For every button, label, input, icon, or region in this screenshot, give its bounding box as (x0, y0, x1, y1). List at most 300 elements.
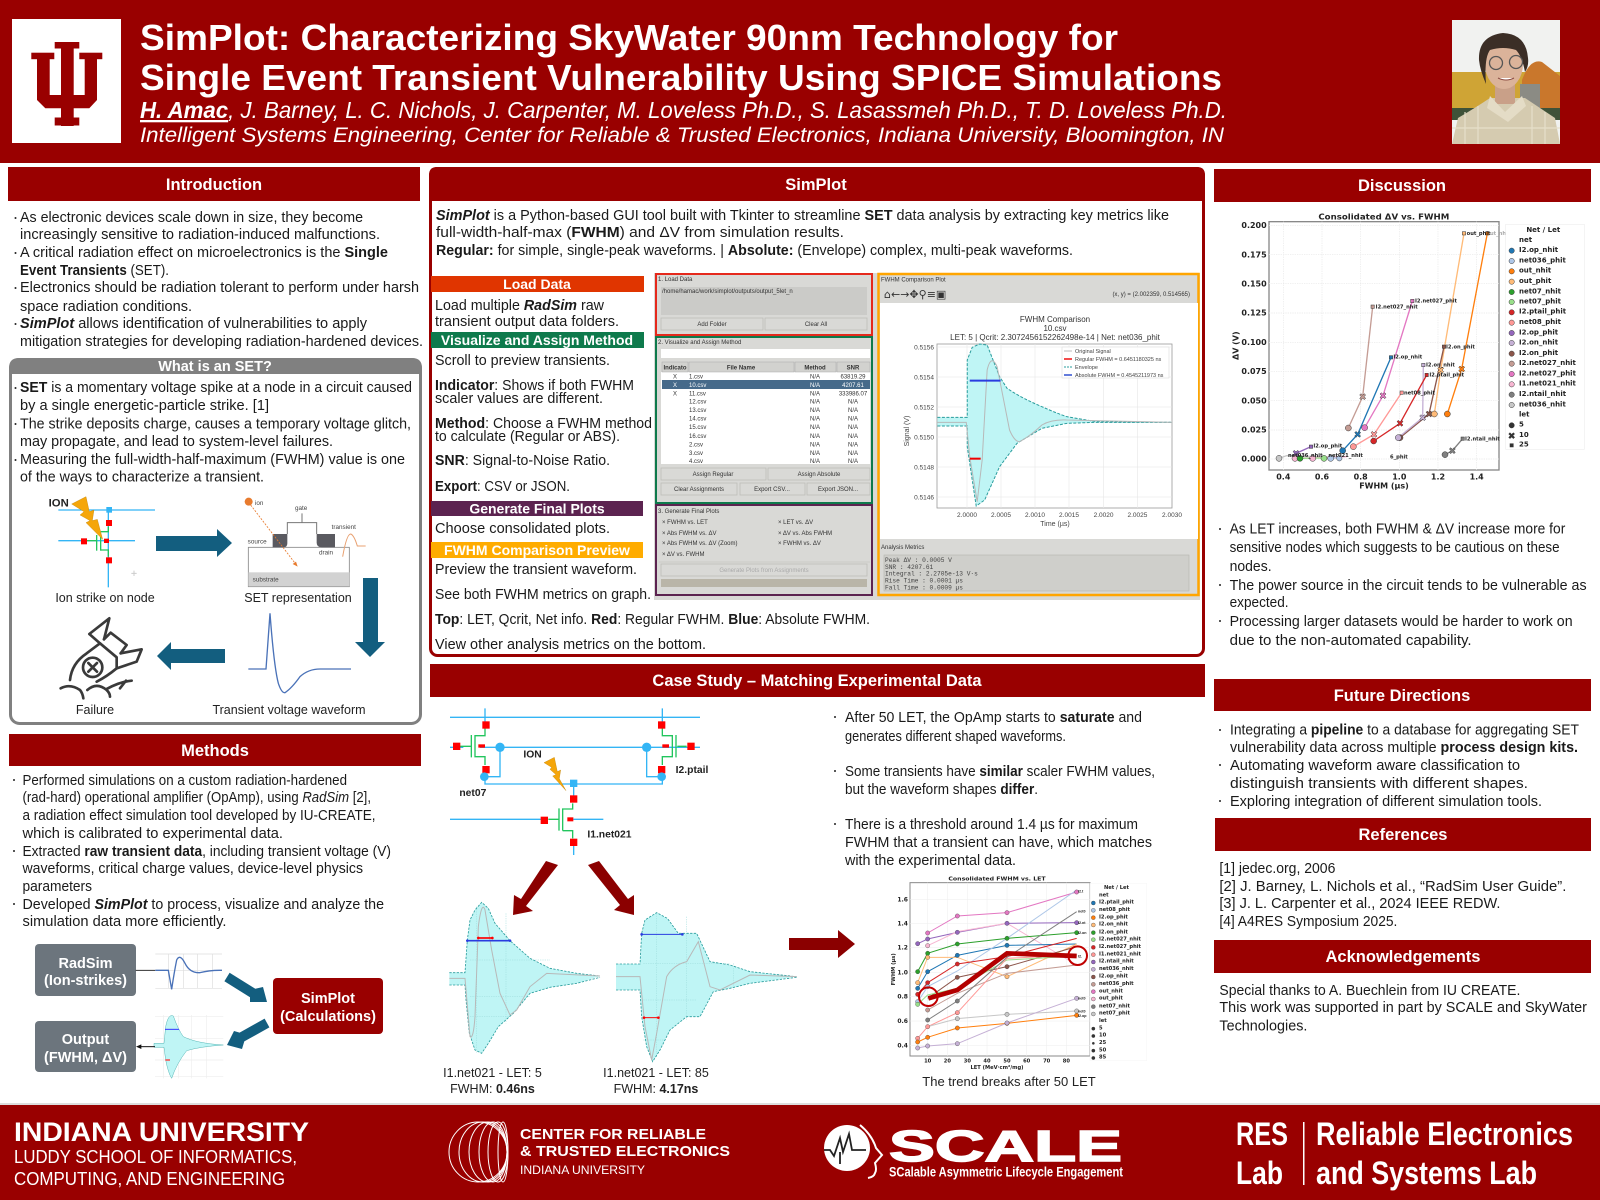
chart: consolidated FWHM vs LET: 50 (1099, 1047, 1107, 1053)
chart: FWHM comparison plot (904, 315, 1182, 528)
chart: consolidated FWHM vs LET: 25 (1099, 1040, 1107, 1046)
chart: consolidated delta V vs FWHM: ut_nhit (1490, 231, 1511, 237)
arrow: to SimPlot (224, 973, 267, 1002)
text block: SimPlot overview: full-width-half-max ( FWHM) and ΔV from simulation results. (436, 225, 844, 241)
chart: FWHM comparison plot: 10.csv (1043, 324, 1067, 333)
GUI: visualize and assign frame: N/A (810, 392, 820, 398)
analysis metrics: Fall Time : 0.0009 µs (885, 584, 963, 592)
chart: consolidated delta V vs FWHM: let (1519, 410, 1530, 418)
panel: methods (9, 734, 421, 1078)
chart: consolidated FWHM vs LET: FWHM (µs) (891, 953, 897, 985)
chart: consolidated delta V vs FWHM: net08_phit (1404, 390, 1436, 396)
chart: FWHM comparison plot: 0.5156 (914, 344, 934, 352)
GUI: visualize and assign frame: SNR (847, 366, 860, 372)
chart: consolidated delta V vs FWHM: net07_nhit (1519, 287, 1562, 295)
caption: LET 85 waveform: I1.net021 - LET: 85 (603, 1066, 709, 1080)
text block: reference list: [4] A4RES Symposium 2025. (1219, 914, 1397, 930)
step: visualize and assign method (431, 332, 652, 495)
heading: methods: Methods (181, 742, 249, 760)
GUI: generate final plots frame: × FWHM vs. LET (662, 520, 708, 526)
text block: acknowledgements: This work was supported in part by SCALE and SkyWater (1219, 1000, 1587, 1016)
chart: consolidated FWHM vs LET: 85 (1099, 1055, 1107, 1061)
GUI: visualize and assign frame: N/A (848, 459, 858, 465)
GUI: load data frame: 1. Load Data (658, 277, 693, 283)
text block: SET definition: The strike deposits charge, causes a temporary voltage glitch, (20, 416, 411, 432)
diagram: OpAmp circuit with ion strike: I2.ptail (676, 765, 709, 776)
text block: methods bullets: waveforms, critical charge values, device-level physics (22, 861, 363, 877)
diagram: OpAmp circuit with ion strike (450, 708, 709, 855)
panel: SimPlot (429, 167, 1205, 656)
step: visualize and assign method: Method: Choose a FWHM method (435, 416, 652, 432)
title: SimPlot: Characterizing SkyWater 90nm Technology for (140, 17, 1118, 58)
caption: LET 5 waveform: FWHM: 0.46ns (450, 1082, 535, 1096)
GUI: load data frame (656, 274, 872, 335)
text block: discussion bullets: due to the non-automated capability. (1230, 633, 1472, 649)
text block: SET definition (14, 380, 412, 486)
chart: consolidated FWHM vs LET: net (1099, 892, 1109, 898)
chart: consolidated delta V vs FWHM: I2.op_nhit (1393, 354, 1423, 360)
chart: consolidated FWHM vs LET: out_nhit (1099, 988, 1123, 994)
caption: ion strike: Ion strike on node (55, 591, 155, 605)
text block: discussion bullets: expected. (1230, 595, 1289, 611)
flow diagram: RadSim to SimPlot to output (35, 944, 383, 1078)
logo: RES Lab: Lab (1236, 1155, 1283, 1191)
heading: acknowledgements (1214, 940, 1591, 973)
text block: methods bullets: Developed SimPlot to process, visualize and analyze the (22, 897, 384, 913)
chart: consolidated delta V vs FWHM: 10 (1519, 431, 1529, 439)
diagram: OpAmp circuit with ion strike: net07 (459, 788, 487, 799)
GUI: visualize and assign frame: Export CSV... (754, 487, 790, 493)
logo: Center for Reliable and Trusted Electronics: & TRUSTED ELECTRONICS (520, 1143, 730, 1160)
GUI: generate final plots frame: × ΔV vs. FWHM (662, 552, 705, 558)
GUI: visualize and assign frame: N/A (810, 383, 820, 389)
text block: methods bullets: which is calibrated to experimental data. (21, 826, 283, 842)
diagram: SET device representation: transient (332, 524, 356, 531)
chart: consolidated FWHM vs LET: I2.on_nhit (1099, 922, 1128, 928)
chart: consolidated delta V vs FWHM: 25 (1519, 441, 1529, 449)
chart: consolidated delta V vs FWHM: I2.on_nhit (1519, 338, 1559, 346)
box: Output: Output (62, 1032, 109, 1048)
text block: introduction bullets: space radiation conditions. (20, 299, 192, 315)
chart: consolidated FWHM vs LET: I2.on_phit (1099, 929, 1128, 935)
step: FWHM comparison preview (431, 542, 870, 653)
chart: consolidated FWHM vs LET: 30 (964, 1059, 971, 1065)
chart: FWHM comparison plot: Signal (V) (904, 416, 911, 446)
chart: FWHM comparison plot: 2.0005 (991, 512, 1011, 519)
text block: methods bullets: (rad-hard) operational amplifier (OpAmp), using RadSim [2], (22, 790, 371, 806)
heading: introduction: Introduction (166, 176, 262, 194)
logo: RES Lab: and Systems Lab (1316, 1155, 1537, 1191)
chart: consolidated delta V vs FWHM: I2.net027_nhit (1376, 304, 1418, 310)
chart: consolidated delta V vs FWHM: Consolidated ΔV vs. FWHM (1318, 212, 1449, 221)
GUI: visualize and assign frame: Assign Regular (693, 472, 733, 478)
chart: consolidated FWHM vs LET: Consolidated FWHM vs. LET (948, 876, 1046, 882)
logo: SCALE: SCalable Asymmetric Lifecycle Engagement (889, 1164, 1123, 1180)
chart: consolidated FWHM vs LET: 1.0 (897, 969, 908, 976)
text block: case study findings (834, 710, 1155, 869)
GUI: generate final plots frame: × ΔV vs. Abs FWHM (778, 531, 832, 537)
GUI: generate final plots frame (656, 505, 872, 595)
text block: reference list: [1] jedec.org, 2006 (1219, 861, 1335, 877)
GUI: FWHM comparison plot frame (878, 274, 1198, 595)
chart: consolidated delta V vs FWHM: net036_phit (1519, 256, 1566, 264)
text block: case study findings: with the experimental data. (844, 853, 1016, 869)
GUI: visualize and assign frame: N/A (848, 451, 858, 457)
GUI: visualize and assign frame: Method (804, 366, 826, 372)
chart: FWHM comparison plot: 0.5150 (914, 434, 934, 442)
heading: references (1215, 818, 1591, 851)
GUI: visualize and assign frame: 14.csv (689, 416, 706, 422)
chart: consolidated delta V vs FWHM: I2.ntail_nhit (1465, 436, 1500, 442)
chart: consolidated FWHM vs LET: I2.nt (1078, 921, 1086, 925)
GUI: visualize and assign frame: File Name (727, 366, 756, 372)
logo: RES Lab: RES (1236, 1116, 1288, 1152)
chart: consolidated delta V vs FWHM: 0.075 (1241, 367, 1267, 376)
GUI: visualize and assign frame: 63819.29 (840, 374, 866, 380)
chart: consolidated FWHM vs LET: I2.op (1078, 1014, 1087, 1018)
chart: consolidated FWHM vs LET: 1.2 (897, 945, 908, 952)
chart: consolidated FWHM vs LET: 1.6 (897, 896, 908, 903)
caption: SET representation: SET representation (244, 591, 352, 605)
step: FWHM comparison preview: View other analysis metrics on the bottom. (435, 637, 706, 653)
text block: future directions bullets: Integrating a pipeline to a database for aggregating SET (1230, 723, 1579, 739)
chart: consolidated delta V vs FWHM: 1.0 (1392, 472, 1407, 481)
chart: consolidated delta V vs FWHM: 0.000 (1241, 455, 1267, 464)
chart: consolidated FWHM vs LET: 80 (1063, 1059, 1070, 1065)
text block: SET definition: of the ways to characterize a transient. (20, 470, 264, 486)
step: visualize and assign method: SNR: Signal-to-Noise Ratio. (435, 453, 610, 469)
GUI: visualize and assign frame: N/A (848, 408, 858, 414)
chart: consolidated FWHM vs LET: Net / Let (1104, 885, 1130, 891)
arrow: to LET 5 waveform (513, 861, 558, 915)
text block: reference list (1219, 861, 1566, 930)
GUI screenshot background (654, 273, 1200, 600)
chart: FWHM comparison plot: FWHM Comparison (1020, 315, 1090, 324)
text block: discussion bullets: As LET increases, both FWHM & ΔV increase more for (1230, 522, 1565, 538)
diagram: ion strike on node: ION (49, 498, 69, 510)
chart: consolidated FWHM vs LET: I2.t (1078, 890, 1084, 894)
text block: methods bullets: a radiation effect simulation tool developed by IU-CREATE, (22, 808, 376, 824)
text block: acknowledgements (1219, 983, 1587, 1034)
chart: consolidated delta V vs FWHM: 6_phit (1390, 454, 1408, 460)
chart: raw transient thumbnail (136, 954, 222, 989)
chart: consolidated delta V vs FWHM: net (1519, 236, 1533, 244)
chart: consolidated FWHM vs LET: 20 (944, 1059, 951, 1065)
chart: consolidated FWHM vs LET: 0.4 (897, 1043, 908, 1050)
GUI: generate final plots frame: × Abs FWHM vs. ΔV (662, 531, 717, 537)
chart: consolidated FWHM vs LET: 5 (1099, 1025, 1103, 1031)
arrow: to failure (157, 642, 225, 670)
panel: case study (430, 664, 1205, 1096)
chart: consolidated delta V vs FWHM: out_nhit (1519, 267, 1552, 275)
text block: SimPlot overview (436, 208, 1169, 259)
analysis metrics: Rise Time : 0.0001 µs (885, 578, 963, 584)
title (140, 17, 1222, 98)
authors: H. Amac, J. Barney, L. C. Nichols, J. Carpenter, M. Loveless Ph.D., S. Lasassmeh Ph.D., T. D. Loveless Ph.D. (140, 97, 1227, 123)
chart: consolidated FWHM vs LET: net036_nhit (1099, 966, 1134, 972)
box: RadSim (35, 944, 136, 996)
chart: consolidated FWHM vs LET: let (1099, 1018, 1107, 1024)
arrow: to waveform (355, 578, 385, 657)
GUI: visualize and assign frame: N/A (810, 434, 820, 440)
chart: consolidated FWHM vs LET: I2.net027_phit (1099, 944, 1142, 950)
GUI: visualize and assign frame: 1.csv (689, 374, 703, 380)
chart: consolidated delta V vs FWHM: 0.100 (1241, 338, 1267, 347)
box: Output: (FWHM, ΔV) (44, 1050, 127, 1066)
logo: Center for Reliable and Trusted Electronics: CENTER FOR RELIABLE (520, 1126, 706, 1143)
chart: consolidated delta V vs FWHM: 0.175 (1241, 250, 1267, 259)
text block: discussion bullets: nodes. (1230, 559, 1272, 575)
GUI: generate final plots frame: 3. Generate Final Plots (658, 509, 719, 515)
text block: methods bullets: parameters (22, 879, 92, 895)
chart: consolidated delta V vs FWHM: I2.on_nhit (1426, 363, 1455, 369)
GUI: visualize and assign frame: 2.csv (689, 442, 703, 448)
chart: consolidated FWHM vs LET: net07_nhit (1099, 1003, 1130, 1009)
chart: consolidated delta V vs FWHM: 0.150 (1241, 279, 1267, 288)
GUI: visualize and assign frame: N/A (810, 374, 820, 380)
diagram: SET device representation (245, 498, 366, 587)
analysis metrics: Analysis Metrics (881, 545, 924, 551)
toolbar icons: ⌂←→✥⚲≡▣ (884, 288, 946, 301)
GUI: visualize and assign frame: 15.csv (689, 425, 706, 431)
chart: consolidated delta V vs FWHM: I2.net027_nhit (1519, 359, 1577, 367)
step: visualize and assign method: scaler values are different. (435, 391, 603, 407)
chart: FWHM comparison plot: Envelope (1075, 365, 1098, 371)
caption: failure: Failure (76, 703, 114, 717)
chart: consolidated FWHM vs LET: I2. (1078, 954, 1082, 958)
panel: references (1215, 818, 1591, 930)
GUI: visualize and assign frame: N/A (810, 416, 820, 422)
chart: consolidated delta V vs FWHM: net021_nhit (1328, 453, 1363, 459)
author photo (1452, 20, 1560, 144)
heading: what is an SET (9, 358, 422, 375)
GUI: load data frame: Clear All (805, 322, 827, 328)
text block: introduction bullets: SimPlot allows identification of vulnerabilities to apply (20, 316, 368, 332)
text block: introduction bullets: mitigation strategies for developing radiation-hardened devices. (20, 334, 423, 350)
GUI: visualize and assign frame: N/A (848, 434, 858, 440)
chart: FWHM comparison plot: Original Signal (1075, 349, 1111, 355)
icon: failure crashed rocket (61, 618, 142, 698)
GUI: visualize and assign frame (656, 337, 872, 503)
text block: introduction bullets: Electronics should be radiation tolerant to perform under harsh (20, 280, 419, 296)
text block: introduction bullets: increasingly sensitive to radiation-induced malfunctions. (20, 227, 380, 243)
heading: introduction (8, 167, 420, 201)
text block: acknowledgements: Technologies. (1219, 1018, 1307, 1034)
chart: consolidated FWHM vs LET: 0.6 (897, 1018, 908, 1025)
chart: consolidated delta V vs FWHM: ΔV (V) (1231, 331, 1240, 360)
chart: LET 85 waveform (616, 913, 797, 1062)
heading: case study (430, 664, 1205, 697)
chart: consolidated FWHM vs LET: net07_phit (1099, 1011, 1131, 1017)
diagram: OpAmp circuit with ion strike: I1.net021 (587, 830, 632, 841)
header banner (0, 0, 1600, 163)
panel: introduction (8, 167, 423, 350)
analysis metrics: SNR : 4207.61 (885, 564, 934, 571)
step: visualize and assign method: Export: CSV or JSON. (435, 479, 570, 495)
diagram: OpAmp circuit with ion strike: ION (523, 750, 542, 761)
panel: what is an SET (9, 358, 422, 724)
text block: future directions bullets: vulnerability data across multiple process design kits. (1230, 740, 1578, 756)
text block: introduction bullets (14, 210, 423, 350)
text block: reference list: [2] J. Barney, L. Nichols et al., “RadSim User Guide”. (1219, 879, 1566, 895)
chart: FWHM comparison plot: Time (µs) (1040, 521, 1070, 528)
step: generate final plots (431, 500, 643, 537)
chart: FWHM comparison plot: 2.0010 (1025, 512, 1045, 519)
box: SimPlot calculations: SimPlot (301, 991, 355, 1007)
chart: output FWHM thumbnail (136, 1015, 223, 1078)
analysis metrics: Integral : 2.2705e-13 V·s (885, 570, 978, 578)
chart: consolidated delta V vs FWHM: 0.6 (1315, 472, 1330, 481)
heading: future directions: Future Directions (1334, 687, 1470, 705)
step: visualize and assign method: to calculate (Regular or ABS). (435, 429, 620, 445)
step: load data (431, 276, 644, 330)
GUI: visualize and assign frame: 333986.07 (839, 392, 868, 398)
caption: LET 5 waveform (443, 1066, 542, 1096)
chart: FWHM comparison plot: Absolute FWHM = 0.4545211973 ns (1075, 373, 1164, 379)
chart: FWHM comparison plot: Regular FWHM = 0.6451180325 ns (1075, 357, 1162, 363)
step: load data: transient output data folders. (435, 314, 619, 330)
chart: consolidated delta V vs FWHM: I2.on_phit (1519, 349, 1559, 357)
chart: consolidated delta V vs FWHM: net07_phit (1519, 297, 1562, 305)
analysis metrics: Peak ΔV : 0.0005 V (885, 557, 952, 564)
heading: discussion (1214, 169, 1591, 202)
text block: introduction bullets: As electronic devices scale down in size, they become (20, 210, 363, 226)
text block: SimPlot overview: Regular: for simple, single-peak waveforms. | Absolute: (Envelope) complex, multi-peak waveforms. (436, 243, 1073, 259)
chart: consolidated FWHM vs LET: net0 (1078, 1009, 1086, 1013)
chart: consolidated delta V vs FWHM: 0.4 (1276, 472, 1291, 481)
GUI: visualize and assign frame: N/A (810, 425, 820, 431)
GUI: visualize and assign frame: X (673, 392, 677, 398)
chart: consolidated delta V vs FWHM: 0.050 (1241, 396, 1267, 405)
GUI: visualize and assign frame: 4.csv (689, 459, 703, 465)
step: FWHM comparison preview: Top: LET, Qcrit, Net info. Red: Regular FWHM. Blue: Absolute FWHM. (435, 612, 870, 628)
chart: consolidated FWHM vs LET: I2.op_phit (1099, 914, 1128, 920)
chart: consolidated FWHM vs LET: net0 (1078, 910, 1086, 914)
step: visualize and assign method: Visualize and Assign Method (441, 332, 633, 348)
caption: LET 85 waveform (603, 1066, 709, 1096)
chart: consolidated delta V vs FWHM: out_phit (1467, 231, 1491, 237)
text block: SET definition: may propagate, and lead to system-level failures. (20, 434, 333, 450)
chart: consolidated FWHM vs LET: I2.net027_nhit (1099, 936, 1142, 942)
logo text: Indiana University Luddy School: LUDDY SCHOOL OF INFORMATICS, (14, 1147, 297, 1167)
chart: consolidated FWHM vs LET: 70 (1043, 1059, 1051, 1065)
box: SimPlot calculations: (Calculations) (280, 1009, 376, 1025)
text block: case study findings: Some transients have similar scaler FWHM values, (845, 764, 1155, 780)
text block: SET definition: by a single energetic-particle strike. [1] (20, 398, 269, 414)
diagram: SET device representation: substrate (253, 577, 279, 584)
text block: methods bullets: Extracted raw transient data, including transient voltage (V) (22, 844, 391, 860)
GUI: load data frame: Add Folder (697, 322, 727, 328)
chart: consolidated FWHM vs LET: I2.on (1078, 931, 1087, 935)
text block: discussion bullets: The power source in the circuit tends to be vulnerable as (1230, 578, 1587, 594)
box: RadSim: (Ion-strikes) (44, 973, 127, 989)
chart: consolidated delta V vs FWHM: net08_phit (1519, 318, 1562, 326)
text block: discussion bullets: sensitive nodes which suggests to be cautious on these (1230, 540, 1560, 556)
text block: acknowledgements: Special thanks to A. Buechlein from IU CREATE. (1219, 983, 1520, 999)
GUI: visualize and assign frame: N/A (848, 442, 858, 448)
step: load data: Load Data (503, 276, 571, 292)
caption: LET 85 waveform: FWHM: 4.17ns (614, 1082, 698, 1096)
caption: transient voltage waveform: Transient voltage waveform (212, 703, 366, 717)
footer banner (0, 1103, 1600, 1200)
chart: consolidated delta V vs FWHM: I2.op_nhit (1519, 246, 1559, 254)
chart: FWHM comparison plot: 0.5148 (914, 464, 934, 472)
chart: FWHM comparison plot: 2.0020 (1094, 512, 1114, 519)
text block: SET definition: SET is a momentary voltage spike at a node in a circuit caused (20, 380, 412, 396)
affiliation: Intelligent Systems Engineering, Center for Reliable & Trusted Electronics, Indiana University, Bloomington, IN (140, 123, 1224, 147)
text block: future directions bullets: Exploring integration of different simulation tools. (1230, 794, 1542, 810)
analysis metrics (881, 545, 1189, 592)
GUI: visualize and assign frame: N/A (810, 408, 820, 414)
chart: consolidated delta V vs FWHM: 0.125 (1241, 309, 1267, 318)
box: RadSim: RadSim (58, 956, 112, 972)
GUI: visualize and assign frame: 16.csv (689, 434, 706, 440)
GUI: visualize and assign frame: N/A (848, 416, 858, 422)
chart: consolidated FWHM vs LET: I1.net021_nhit (1099, 951, 1142, 957)
chart: consolidated FWHM vs LET: 60 (1023, 1059, 1031, 1065)
logo: Center for Reliable and Trusted Electronics (449, 1122, 730, 1182)
chart: consolidated delta V vs FWHM: 1.4 (1470, 472, 1484, 481)
diagram: SET device representation: source (248, 538, 267, 545)
heading: future directions (1214, 679, 1591, 711)
step: generate final plots: Generate Final Plots (469, 500, 605, 516)
chart: consolidated delta V vs FWHM (1231, 212, 1584, 491)
chart: consolidated delta V vs FWHM: I2.op_phit (1313, 444, 1343, 450)
heading: SimPlot: SimPlot (785, 176, 847, 194)
GUI: generate final plots frame: × LET vs. ΔV (778, 520, 813, 526)
text block: case study findings: but the waveform shapes differ. (845, 782, 1038, 798)
chart: consolidated delta V vs FWHM: out_phit (1519, 277, 1552, 285)
text block: SET definition: Measuring the full-width-half-maximum (FWHM) value is one (20, 452, 405, 468)
heading: case study: Case Study – Matching Experimental Data (652, 672, 982, 690)
GUI: visualize and assign frame: 12.csv (689, 400, 706, 406)
chart: consolidated delta V vs FWHM: net036_nhit (1288, 453, 1323, 459)
GUI: visualize and assign frame: N/A (848, 400, 858, 406)
heading: what is an SET: What is an SET? (158, 359, 272, 375)
chart: consolidated FWHM vs LET: I2.ntail_nhit (1099, 959, 1134, 965)
GUI: visualize and assign frame: X (673, 383, 677, 389)
logo text: Indiana University Luddy School: INDIANA UNIVERSITY (14, 1117, 309, 1147)
step: FWHM comparison preview: See both FWHM metrics on graph. (435, 587, 651, 603)
panel: future directions (1214, 679, 1591, 810)
GUI: visualize and assign frame: N/A (810, 459, 820, 465)
text block: discussion bullets: Processing larger datasets would be harder to work on (1230, 614, 1573, 630)
chart: consolidated FWHM vs LET: 10 (1099, 1033, 1107, 1039)
chart: consolidated delta V vs FWHM: FWHM (µs) (1359, 482, 1409, 491)
chart: FWHM comparison plot: 0.5154 (914, 374, 934, 382)
chart: transient voltage waveform (248, 613, 351, 693)
GUI: visualize and assign frame: N/A (810, 451, 820, 457)
step: FWHM comparison preview: FWHM Comparison Preview (444, 542, 630, 558)
diagram: ion strike on node (49, 497, 155, 587)
title: Single Event Transient Vulnerability Using SPICE Simulations (140, 57, 1222, 98)
chart: FWHM comparison plot: 0.5152 (914, 404, 934, 412)
chart: consolidated delta V vs FWHM: net036_nhit (1519, 400, 1566, 408)
box: SimPlot calculations (273, 978, 383, 1034)
logo: SCALE: SCALE (889, 1122, 1122, 1171)
text block: case study findings: After 50 LET, the OpAmp starts to saturate and (845, 710, 1142, 726)
diagram: SET device representation: drain (319, 550, 334, 557)
text block: case study findings: generates different shaped waveforms. (845, 729, 1066, 745)
text block: introduction bullets: A critical radiation effect on microelectronics is the Single (20, 245, 388, 261)
logo: SCALE (824, 1122, 1123, 1180)
text block: future directions bullets (1219, 723, 1579, 810)
GUI: visualize and assign frame: 3.csv (689, 451, 703, 457)
chart: consolidated delta V vs FWHM: I2.ptail_phit (1519, 308, 1567, 316)
panel: discussion (1214, 169, 1591, 649)
chart: consolidated FWHM vs LET: I2.ptail_phit (1099, 900, 1134, 906)
chart: FWHM comparison plot: 2.0000 (957, 512, 977, 519)
